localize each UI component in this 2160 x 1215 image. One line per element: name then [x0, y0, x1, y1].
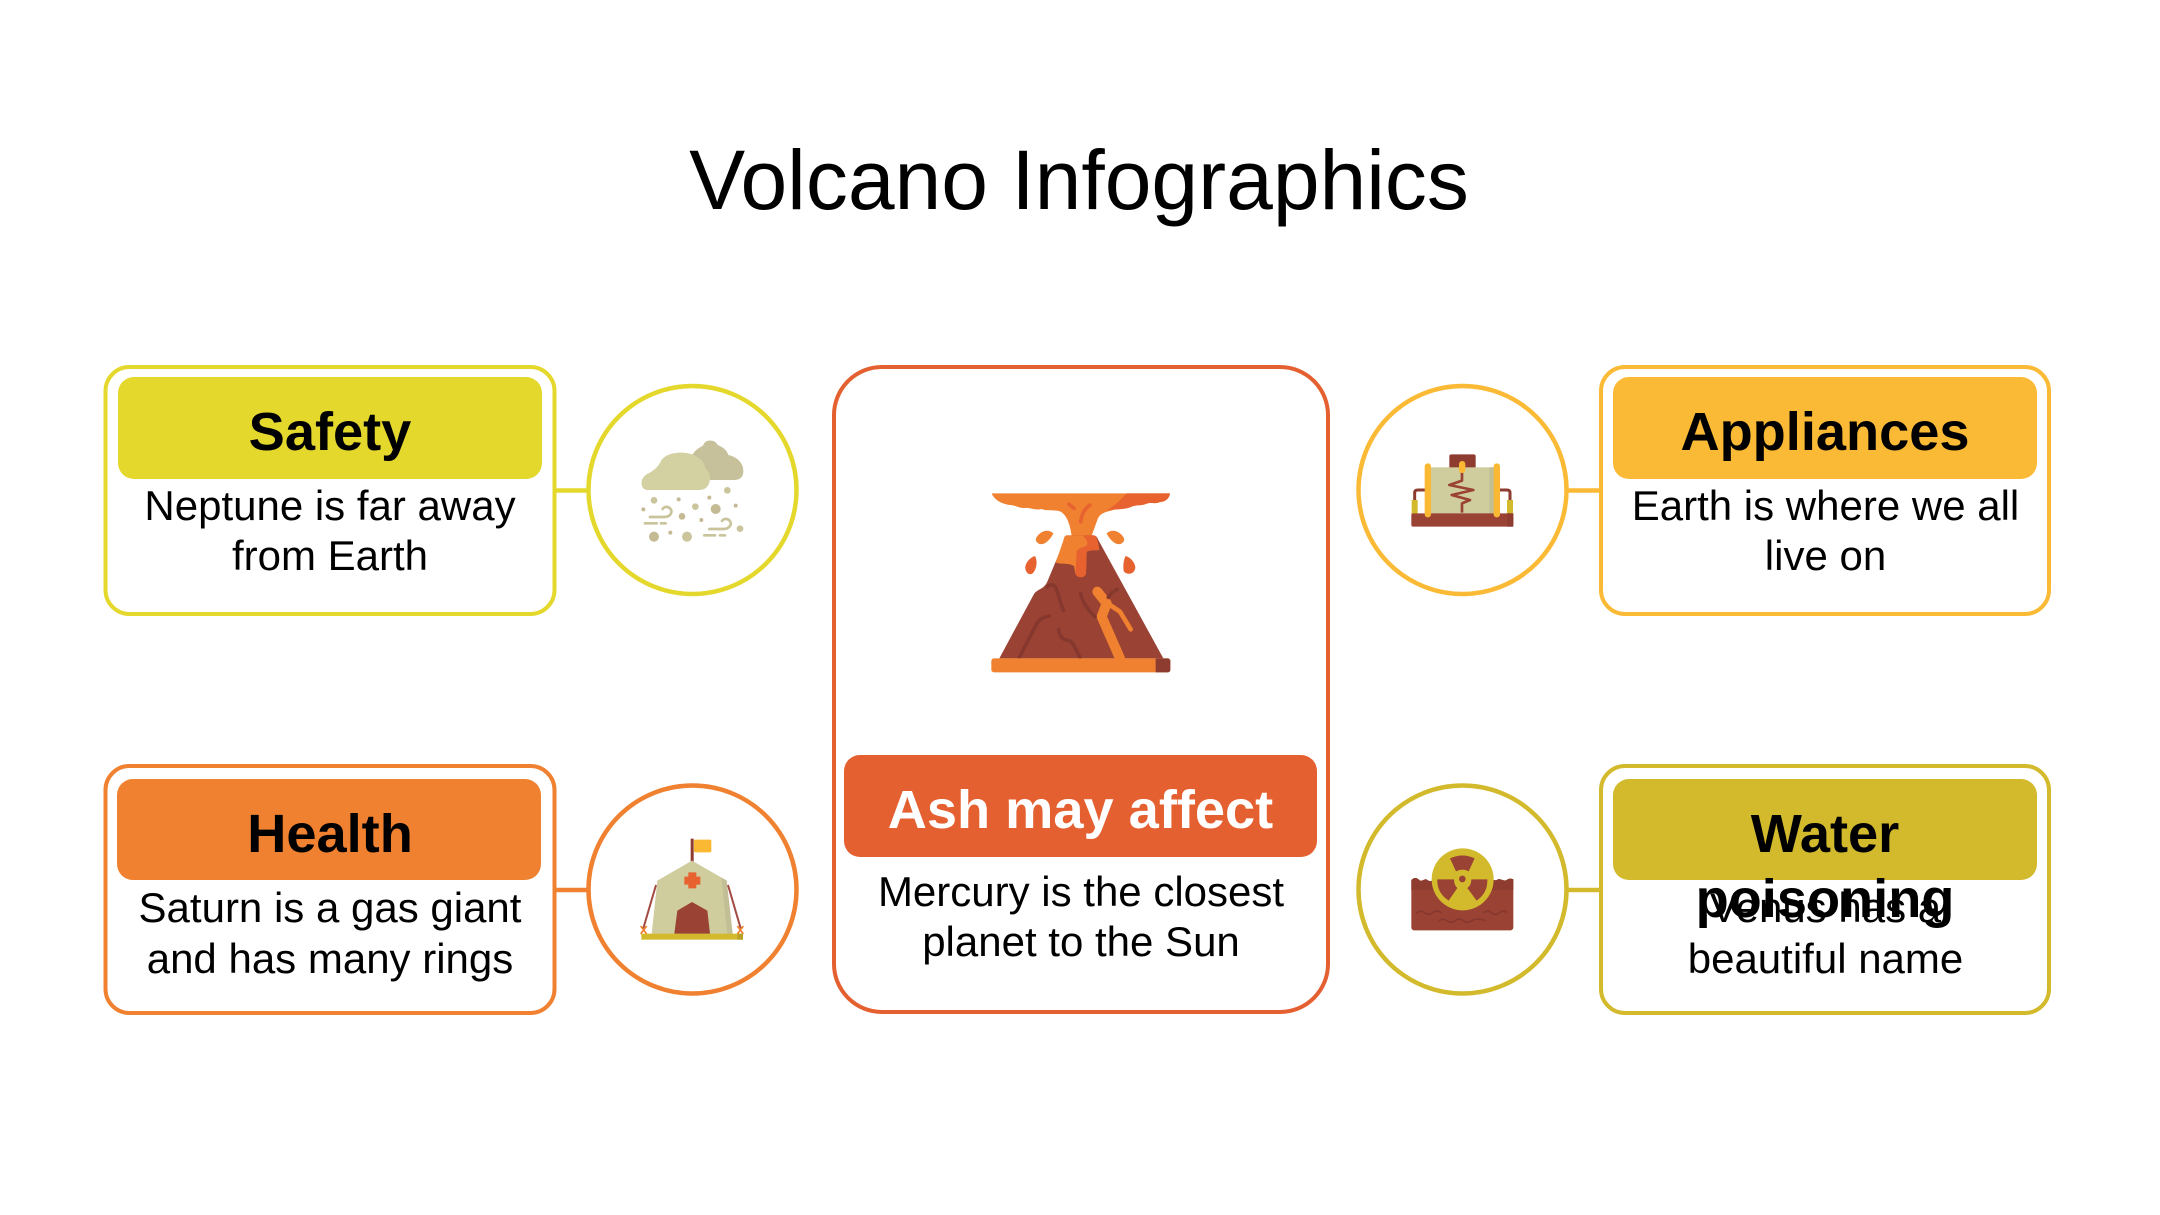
- heading: safety: [118, 377, 542, 479]
- heading: appliances: Appliances: [1680, 402, 1970, 462]
- panel: appliances: [1358, 367, 2049, 614]
- text: appliances: Earth is where we all: [1632, 482, 2019, 529]
- icon: contaminated water: [1411, 848, 1513, 930]
- heading: ash may affect: Ash may affect: [888, 780, 1273, 840]
- panel: center ash may affect: [834, 367, 1328, 1012]
- text: health: and has many rings: [147, 935, 513, 982]
- icon: ash cloud: [641, 440, 743, 542]
- text: safety: from Earth: [232, 532, 428, 579]
- icon: seismograph: [1411, 454, 1513, 527]
- icon circle: health: [588, 786, 796, 994]
- text: safety: Neptune is far away: [144, 482, 516, 529]
- panel: water poisoning: [1358, 766, 2049, 1013]
- text: health: Saturn is a gas giant: [139, 884, 521, 931]
- heading: water poisoning: [1613, 779, 2037, 929]
- text: water: beautiful name: [1688, 935, 1963, 982]
- heading: appliances: [1613, 377, 2037, 479]
- icon circle: appliances: [1358, 386, 1566, 594]
- icon circle: water: [1358, 786, 1566, 994]
- text: appliances: live on: [1765, 532, 1886, 579]
- icon circle: safety: [588, 386, 796, 594]
- panel: health: [106, 766, 796, 1013]
- heading: health: Health: [247, 804, 413, 864]
- heading: water poisoning: Water: [1751, 804, 1899, 864]
- text: center: planet to the Sun: [922, 918, 1240, 965]
- heading: health: [117, 779, 541, 880]
- title: Volcano Infographics: [689, 133, 1469, 227]
- text: center: Mercury is the closest: [878, 868, 1284, 915]
- icon: medical tent: [641, 839, 743, 940]
- icon: volcano: [991, 493, 1170, 672]
- heading: safety: Safety: [249, 402, 411, 462]
- panel: safety: [106, 367, 796, 614]
- heading: ash may affect: [844, 755, 1317, 857]
- text: water: Venus has a: [1710, 884, 1941, 931]
- heading: water poisoning: poisoning: [1696, 869, 1954, 929]
